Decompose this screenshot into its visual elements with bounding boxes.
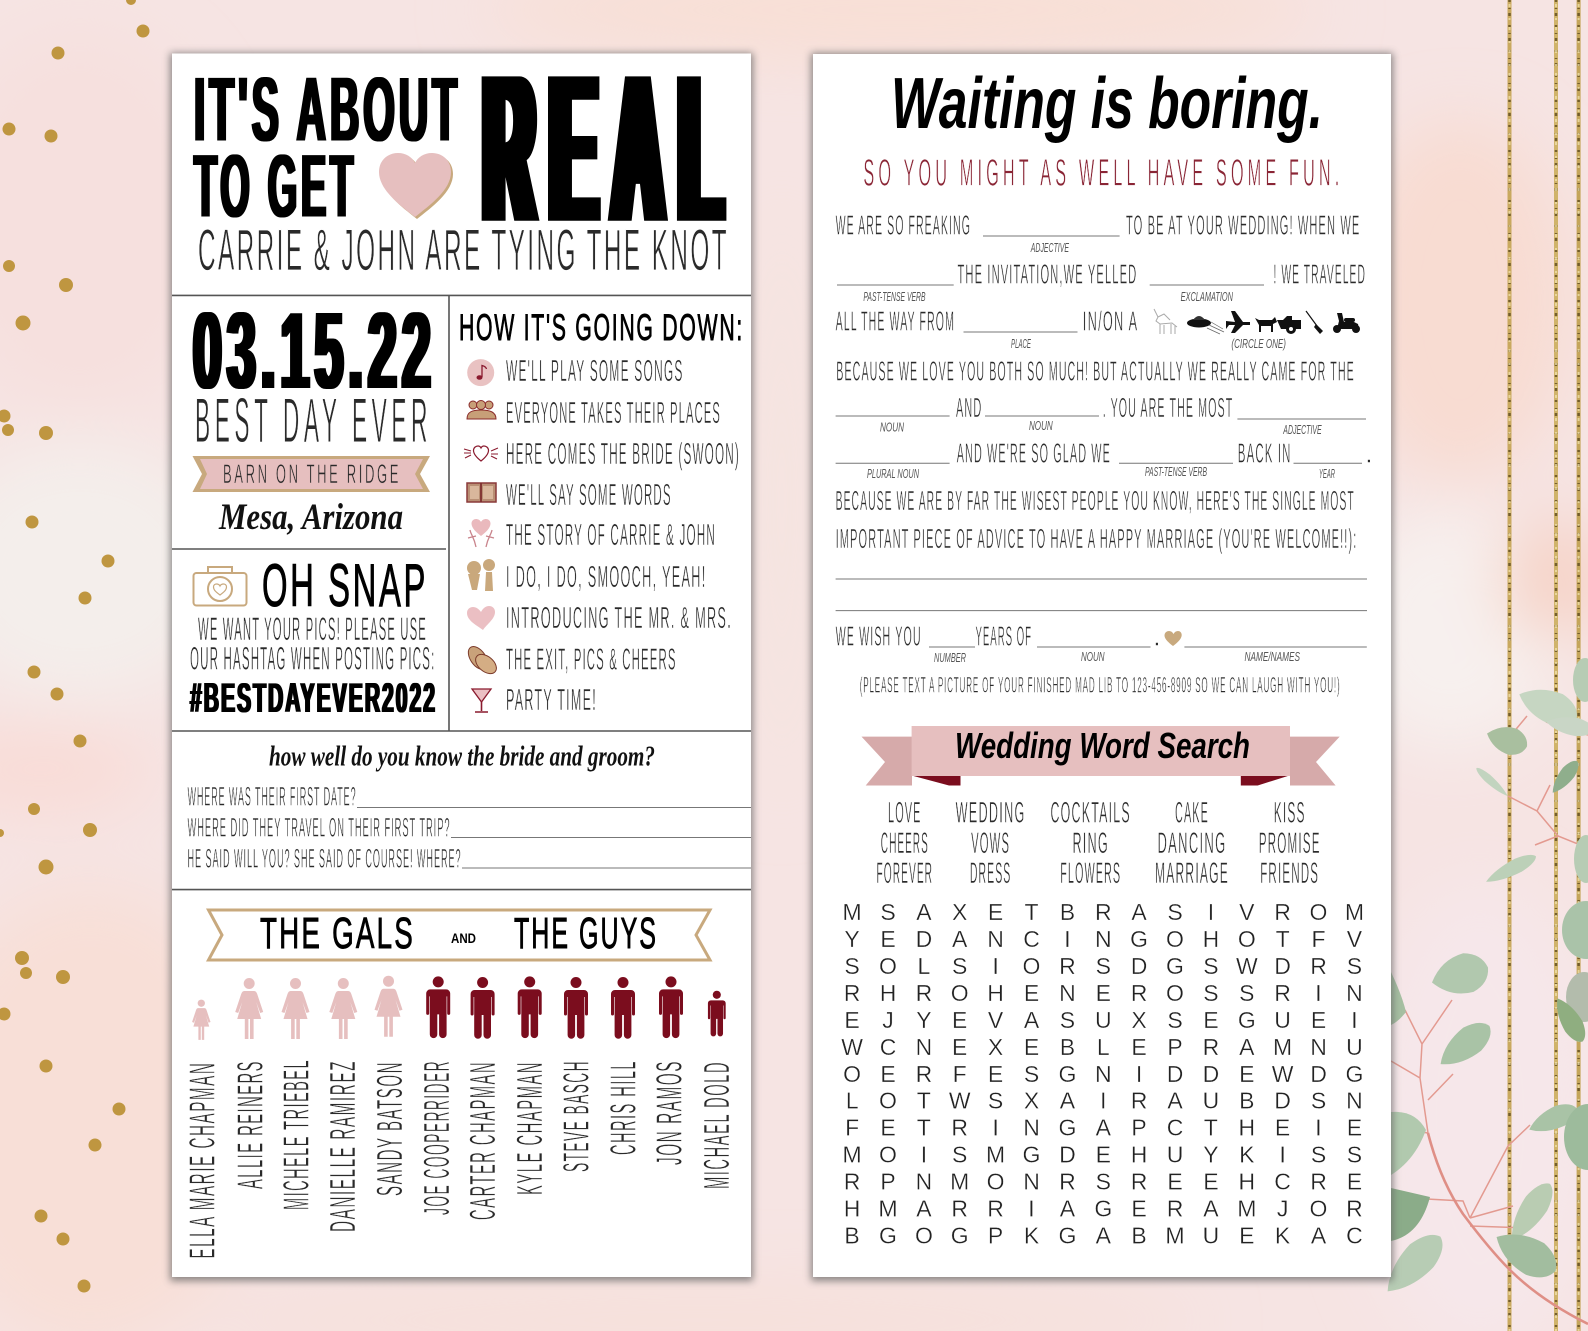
text: CARRIE & JOHN ARE TYING THE KNOT xyxy=(198,218,729,283)
banner: wedding word search: Wedding Word Search xyxy=(955,725,1250,766)
blank captions: PAST-TENSE VERB xyxy=(1145,464,1207,479)
panel: left card: MICHELE TRIEBEL xyxy=(276,1059,316,1210)
banner: wedding word search xyxy=(862,725,1340,786)
text: INTRODUCING THE MR. & MRS. xyxy=(506,600,732,635)
mad lib text: YEARS OF xyxy=(976,620,1032,652)
quiz: how well do you know the bride and groom: WHERE WAS THEIR FIRST DATE? xyxy=(188,782,356,812)
blank captions: PLURAL NOUN xyxy=(867,466,919,481)
panel: left card: ALLIE REINERS xyxy=(230,1060,271,1189)
icon: unicorn xyxy=(1154,309,1177,334)
word list: LOVE xyxy=(888,796,922,830)
panel: left card: WE WANT YOUR PICS! PLEASE USE xyxy=(198,611,427,647)
text: HERE COMES THE BRIDE (SWOON) xyxy=(506,436,740,471)
people: the guys xyxy=(426,976,726,1039)
panel: left card: I DO, I DO, SMOOCH, YEAH! xyxy=(506,559,706,594)
mad lib text: . xyxy=(1365,438,1376,468)
quiz: how well do you know the bride and groom: how well do you know the bride and groom? xyxy=(269,742,655,773)
panel: right card xyxy=(811,53,1393,1281)
oh snap block xyxy=(190,552,437,721)
icon: camera xyxy=(194,567,246,606)
icon: scooter xyxy=(1333,313,1360,333)
gold confetti dots xyxy=(0,0,150,1292)
mad lib text: WE WISH YOU xyxy=(836,620,922,652)
title: waiting is boring: Waiting is boring. xyxy=(891,64,1323,144)
word list: VOWS xyxy=(971,827,1010,860)
panel: how it's going down: WE'LL SAY SOME WORDS xyxy=(506,477,672,512)
panel: right card: FRIENDS xyxy=(1260,857,1319,890)
blank captions: ADJECTIVE xyxy=(1283,422,1322,437)
word search grid: HMARRIAGERAMJOR xyxy=(844,1196,1363,1222)
word search grid: LOTWSXAIRAUBDSN xyxy=(846,1088,1363,1114)
panel: left card: DANIELLE RAMIREZ xyxy=(322,1060,363,1232)
banner: the gals and the guys: AND xyxy=(451,930,476,946)
item: places xyxy=(467,395,721,430)
mad lib text: IN/ON A xyxy=(1083,306,1138,337)
location: Mesa, Arizona xyxy=(218,497,403,538)
venue banner xyxy=(192,456,430,492)
word search grid: MSAXETBRASIVROM xyxy=(843,899,1364,925)
panel: left card xyxy=(170,31,753,1281)
panel: left card: CHRIS HILL xyxy=(603,1060,644,1155)
panel: left card: STEVE BASCH xyxy=(556,1060,597,1172)
blank captions: NUMBER xyxy=(934,650,966,665)
icon: broom xyxy=(1306,311,1317,326)
mad lib text: . xyxy=(1153,620,1164,652)
mad lib text xyxy=(836,209,1376,665)
section dividers xyxy=(172,295,751,890)
quiz: how well do you know the bride and groom xyxy=(188,742,751,874)
word list: MARRIAGE xyxy=(1155,857,1229,890)
blank captions: PLACE xyxy=(1011,336,1031,351)
blank captions: EXCLAMATION xyxy=(1181,289,1233,304)
word search grid: EJYEVASUXSEGUEI xyxy=(844,1007,1358,1033)
text: REAL xyxy=(484,31,738,266)
item: party xyxy=(472,682,597,717)
quiz: how well do you know the bride and groom: WHERE DID THEY TRAVEL ON THEIR FIRST TRIP? xyxy=(188,812,450,842)
item: bride xyxy=(464,436,740,471)
mad lib text: ALL THE WAY FROM xyxy=(836,306,955,337)
panel: right card: PROMISE xyxy=(1259,827,1321,860)
panel: left card: JON RAMOS xyxy=(649,1060,690,1165)
banner: the gals and the guys: THE GALS xyxy=(260,909,415,958)
panel: how it's going down xyxy=(459,307,744,717)
mad lib text: AND WE'RE SO GLAD WE xyxy=(957,438,1111,468)
panel: left card: ELLA MARIE CHAPMAN xyxy=(181,1062,222,1259)
mad lib text: AND xyxy=(956,392,982,423)
text: EVERYONE TAKES THEIR PLACES xyxy=(506,395,721,430)
word list: RING xyxy=(1072,827,1109,860)
eucalyptus branches and leaves xyxy=(1376,658,1588,1324)
gold foil vertical lines xyxy=(1508,0,1581,1331)
icon: airplane xyxy=(1226,311,1250,333)
word list: COCKTAILS xyxy=(1050,796,1131,830)
word search grid: WCNEXEBLEPRAMNU xyxy=(841,1034,1363,1060)
word search grid: YEDANCINGOHOTFV xyxy=(844,926,1363,952)
panel: how it's going down: WE'LL PLAY SOME SONGS xyxy=(506,353,684,388)
blank captions: NOUN xyxy=(1081,649,1105,664)
headline: it's about to get real xyxy=(194,31,738,266)
panel: left card: OUR HASHTAG WHEN POSTING PICS: xyxy=(190,640,436,676)
word search grid: BGOGPKGABMUEKAC xyxy=(844,1222,1363,1248)
word list: KISS xyxy=(1274,796,1306,830)
blank captions: NOUN xyxy=(1029,418,1053,433)
panel: left card: JOE COOPERRIDER xyxy=(416,1060,457,1215)
panel: left card: MICHAEL DOLD xyxy=(696,1061,737,1189)
names list xyxy=(181,1059,737,1259)
headline: it's about to get real: TO GET xyxy=(194,135,357,235)
blank captions: PAST-TENSE VERB xyxy=(863,289,926,304)
item: words xyxy=(467,477,672,512)
headline: it's about to get real: IT'S ABOUT xyxy=(194,59,461,160)
mad lib text: YEAR xyxy=(1319,466,1335,481)
icon row: transport choices xyxy=(1154,309,1360,334)
mad lib text: . YOU ARE THE MOST xyxy=(1103,392,1233,423)
word search grid: RPNMONRSREEHCRE xyxy=(844,1169,1362,1195)
panel: how it's going down: PARTY TIME! xyxy=(506,682,597,717)
item: story xyxy=(468,517,716,552)
text: ! WE TRAVELED xyxy=(1274,259,1366,290)
panel: left card: CARTER CHAPMAN xyxy=(462,1061,503,1220)
word list: FLOWERS xyxy=(1060,857,1121,890)
item: exit xyxy=(464,642,677,677)
panel: left card: KYLE CHAPMAN xyxy=(509,1061,550,1195)
banner: the gals and the guys xyxy=(208,909,710,960)
word search grid: OERFESGNIDDEWDG xyxy=(843,1061,1363,1087)
text: THE STORY OF CARRIE & JOHN xyxy=(506,517,716,552)
panel: how it's going down: THE EXIT, PICS & CHEERS xyxy=(506,642,677,676)
word list: CAKE xyxy=(1175,796,1209,830)
mad lib text: THE INVITATION,WE YELLED xyxy=(958,259,1137,290)
fill-in blanks xyxy=(836,236,1367,647)
word list: DRESS xyxy=(970,857,1011,890)
icon: horse and carriage xyxy=(1255,316,1301,334)
item: play songs xyxy=(467,353,684,388)
item: introducing xyxy=(467,600,732,635)
banner: the gals and the guys: THE GUYS xyxy=(514,909,658,958)
blank captions: (CIRCLE ONE) xyxy=(1231,336,1286,351)
icon: ufo xyxy=(1187,316,1224,334)
word search grid: FETRINGAPCTHEIE xyxy=(845,1115,1362,1141)
people: the gals xyxy=(192,976,402,1040)
panel: left card: BEST DAY EVER xyxy=(195,386,432,456)
panel: left card: 03.15.22 xyxy=(193,290,436,412)
blank captions xyxy=(863,240,1335,665)
word list: CHEERS xyxy=(881,827,929,860)
mad lib text: BACK IN xyxy=(1238,438,1292,468)
quiz: how well do you know the bride and groom: HE SAID WILL YOU? SHE SAID OF COURSE! WHERE? xyxy=(188,844,462,874)
word search grid: SOLSIORSDGSWDRS xyxy=(844,953,1362,979)
word list: DANCING xyxy=(1158,827,1226,860)
blank captions: NAME/NAMES xyxy=(1244,649,1300,664)
word list: FOREVER xyxy=(877,857,933,890)
venue banner: BARN ON THE RIDGE xyxy=(223,459,401,489)
word search grid xyxy=(841,899,1364,1248)
oh snap block: #BESTDAYEVER2022 xyxy=(190,674,437,721)
word list: WEDDING xyxy=(956,796,1026,830)
blank captions: ADJECTIVE xyxy=(1030,240,1069,255)
panel: left card: SANDY BATSON xyxy=(369,1061,410,1196)
word search grid: MOISMGDEHUYKISS xyxy=(843,1142,1362,1168)
word list xyxy=(877,796,1321,890)
panel: how it's going down: HOW IT'S GOING DOWN: xyxy=(459,307,744,348)
icon: heart xyxy=(379,153,453,219)
oh snap block: OH SNAP xyxy=(262,552,428,619)
word search grid: RHROHENEROSSRIN xyxy=(844,980,1363,1006)
blank captions: NOUN xyxy=(880,419,904,434)
mad lib text: WE ARE SO FREAKING xyxy=(836,209,971,240)
date block xyxy=(192,290,436,538)
item: smooch xyxy=(467,559,706,594)
icon: small heart xyxy=(1164,631,1182,646)
